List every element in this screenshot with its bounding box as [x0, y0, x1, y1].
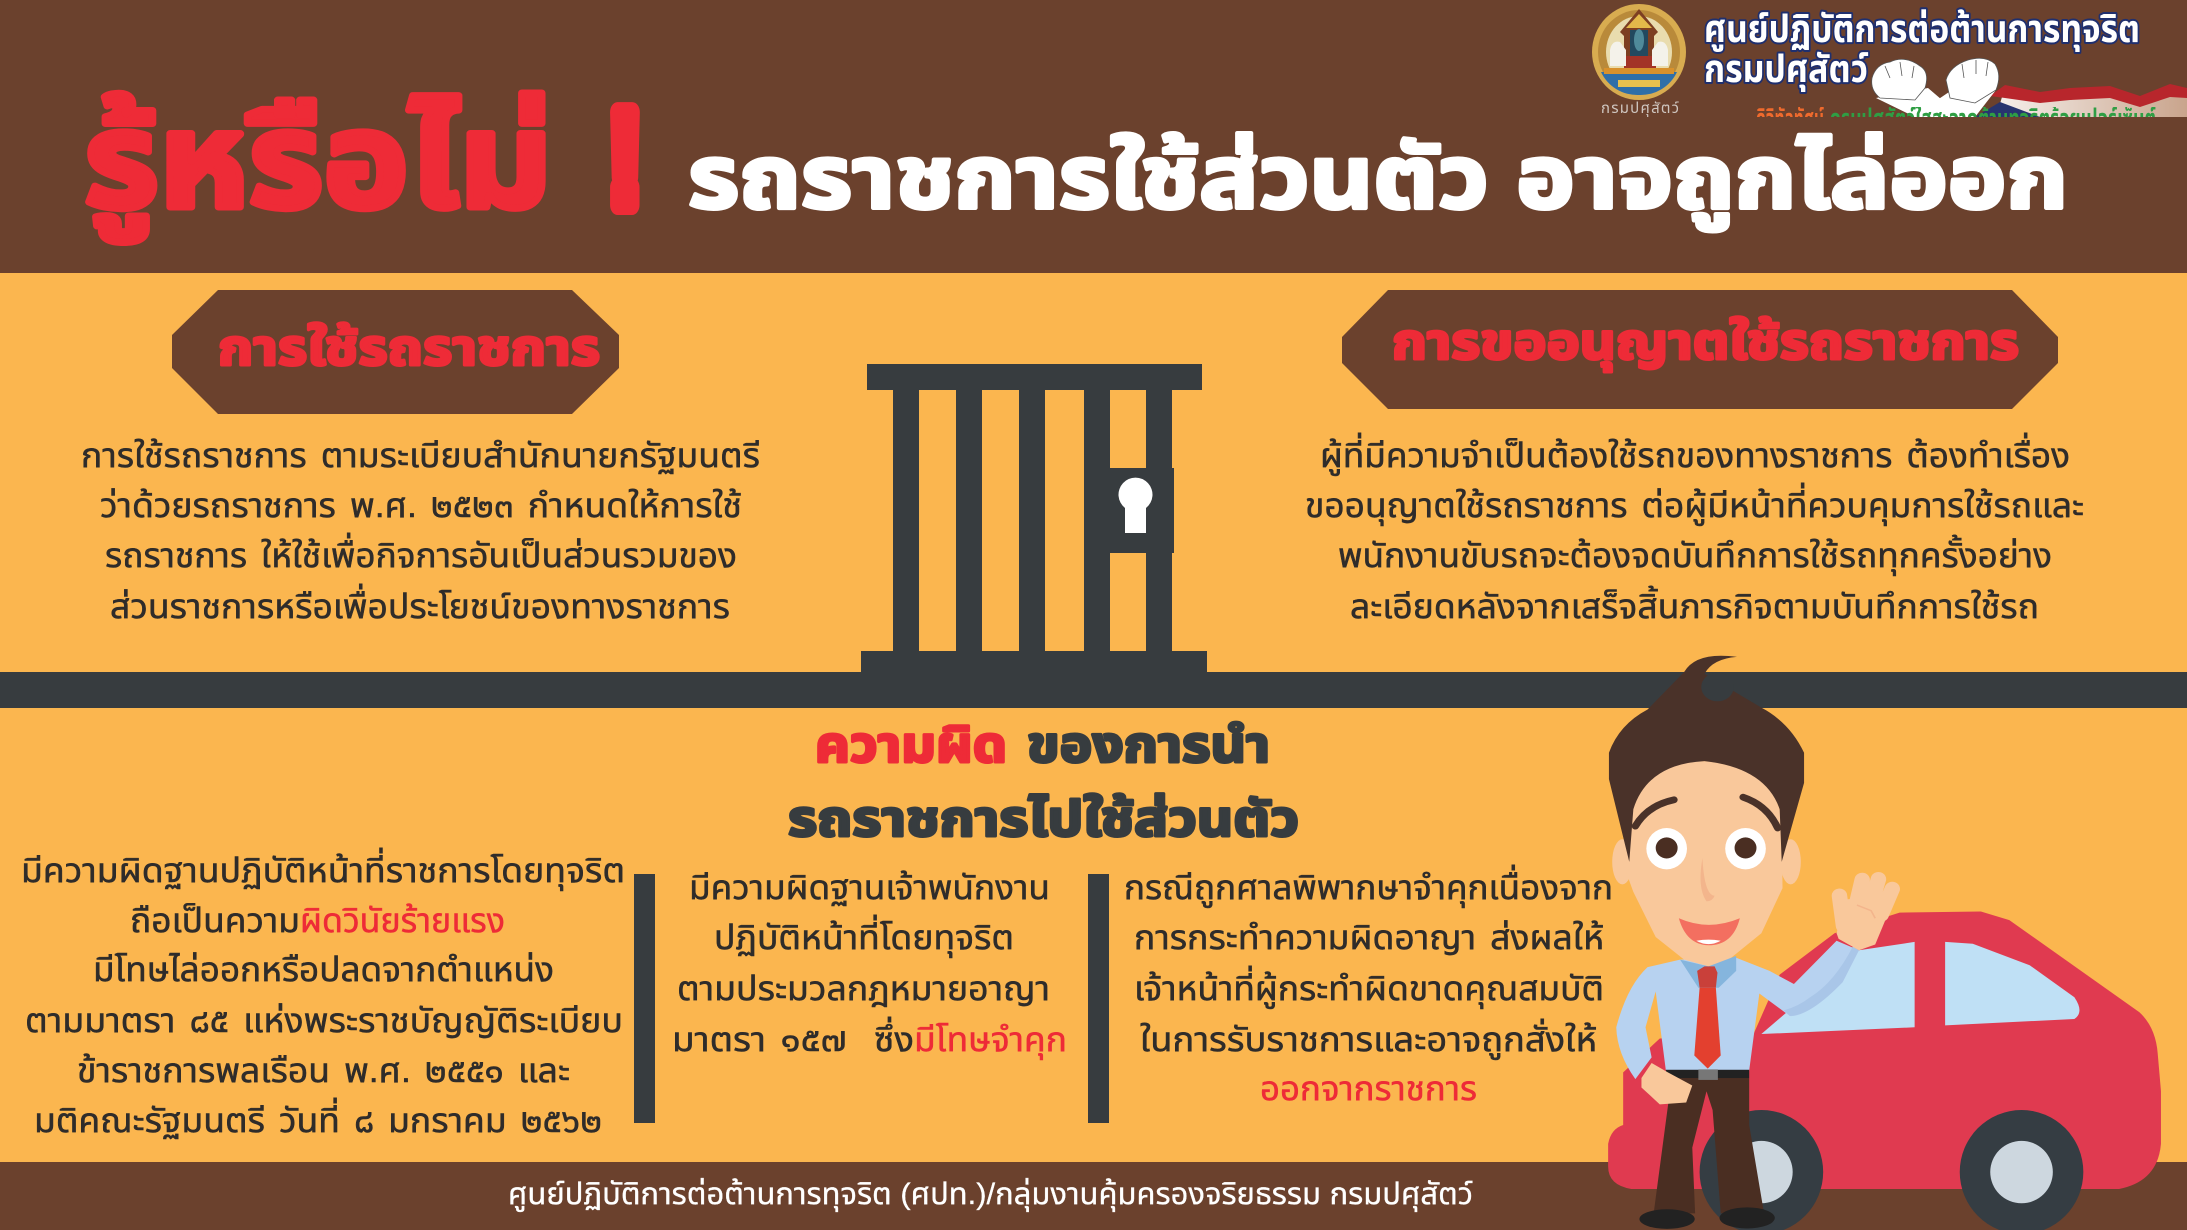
title: did you know: ! [608, 83, 642, 234]
agency name: ศูนย์ปฏิบัติการต่อต้านการทุจริต [1704, 9, 2140, 52]
eyes [1646, 828, 1687, 869]
text: use of official cars: การใช้รถราชการ ตามระเบียบสำนักนายกรัฐมนตรี [81, 437, 760, 475]
text: criminal offence: มีโทษจำคุก [914, 1021, 1067, 1060]
text: disciplinary offence: ตามมาตรา ๘๕ แห่งพระราชบัญญัติระเบียบ [25, 1002, 623, 1040]
illustration: man and car [1608, 656, 2161, 1230]
text: disciplinary offence: ข้าราชการพลเรือน พ.ศ. ๒๕๕๑ และ [77, 1052, 570, 1090]
text: criminal offence: มีความผิดฐานเจ้าพนักงาน [689, 869, 1050, 907]
badge: use of official cars: การใช้รถราชการ [218, 320, 600, 376]
icon: red car [1608, 911, 2161, 1230]
footer band [0, 1162, 2187, 1230]
necktie [1697, 966, 1717, 988]
heading: offences: ของการนำ [1027, 717, 1270, 773]
text: requesting permission: ขออนุญาตใช้รถราชการ ต่อผู้มีหน้าที่ควบคุมการใช้รถและ [1305, 482, 2084, 526]
text: requesting permission: พนักงานขับรถจะต้องจดบันทึกการใช้รถทุกครั้งอย่าง [1338, 534, 2052, 576]
mouth [1679, 918, 1740, 945]
slogan (clipped) [1757, 107, 2156, 117]
hair [1609, 656, 1804, 862]
text: use of official cars: ว่าด้วยรถราชการ พ.ศ. ๒๕๒๓ กำหนดให้การใช้ [100, 487, 742, 525]
text: use of official cars [81, 437, 760, 626]
text: loss of qualification: กรณีถูกศาลพิพากษาจำคุกเนื่องจาก [1124, 864, 1613, 908]
footer credit: ศูนย์ปฏิบัติการต่อต้านการทุจริต (ศปท.)/กลุ่มงานคุ้มครองจริยธรรม กรมปศุสัตว์ [508, 1178, 1473, 1212]
text: requesting permission [1305, 432, 2084, 626]
logo block [1592, 4, 2187, 117]
clasped fists [1872, 58, 1999, 117]
icon: keyhole [1118, 478, 1152, 533]
shirt [1616, 941, 1859, 1079]
belt [1666, 1070, 1749, 1078]
text: disciplinary offence: มีโทษไล่ออกหรือปลดจากตำแหน่ง [93, 951, 554, 989]
text: use of official cars: รถราชการ ให้ใช้เพื่อกิจการอันเป็นส่วนรวมของ [105, 532, 737, 575]
icon: jail cell [861, 364, 1207, 672]
text: disciplinary offence: ผิดวินัยร้ายแรง [300, 902, 505, 940]
divider [634, 874, 655, 1123]
panel: requesting permission [1305, 290, 2084, 626]
text: requesting permission: ละเอียดหลังจากเสร็จสิ้นภารกิจตามบันทึกการใช้รถ [1350, 585, 2039, 626]
heading: offences: รถราชการไปใช้ส่วนตัว [788, 791, 1299, 847]
panel: use of official cars [81, 290, 760, 626]
text: disciplinary offence: มีความผิดฐานปฏิบัติหน้าที่ราชการโดยทุจริต [21, 847, 625, 891]
slogan (clipped): ดิจิทัลทัศน์ [1756, 103, 1824, 133]
text: loss of qualification: เจ้าหน้าที่ผู้กระทำผิดขาดคุณสมบัติ [1134, 965, 1604, 1009]
text: use of official cars: ส่วนราชการหรือเพื่อประโยชน์ของทางราชการ [110, 583, 730, 626]
nose [1701, 858, 1715, 901]
badge: requesting permission [1342, 290, 2058, 409]
text: criminal offence: ตามประมวลกฎหมายอาญา [677, 970, 1050, 1008]
text: requesting permission: ผู้ที่มีความจำเป็นต้องใช้รถของทางราชการ ต้องทำเรื่อง [1320, 432, 2070, 476]
text: loss of qualification: การกระทำความผิดอาญา ส่งผลให้ [1134, 919, 1604, 957]
flag strip [1975, 84, 2187, 117]
text: loss of qualification: ในการรับราชการและอาจถูกสั่งให้ [1140, 1018, 1597, 1060]
trousers [1654, 1078, 1763, 1213]
text: criminal offence [672, 869, 1067, 1060]
emblem caption: กรมปศุสัตว์ [1601, 100, 1679, 117]
eyebrows [1635, 797, 1778, 828]
text: criminal offence: ปฏิบัติหน้าที่โดยทุจริต [714, 914, 1014, 958]
hands [1641, 1063, 1692, 1104]
emblem [1592, 4, 1686, 100]
text: loss of qualification: ออกจากราชการ [1260, 1070, 1477, 1108]
agency name: กรมปศุสัตว์ [1704, 49, 1869, 92]
badge: use of official cars [172, 290, 619, 414]
collar [1680, 956, 1736, 988]
text: disciplinary offence: ถือเป็นความ [130, 902, 300, 940]
ground bar [0, 672, 2187, 708]
title: official car for personal use: รถราชการใช้ส่วนตัว อาจถูกไล่ออก [688, 128, 2068, 232]
icon: man [1609, 656, 1896, 1229]
neck and face [1612, 839, 1633, 884]
text: criminal offence: มาตรา ๑๕๗ [672, 1021, 847, 1059]
badge: requesting permission: การขออนุญาตใช้รถราชการ [1392, 314, 2019, 372]
heading: offences [788, 717, 1299, 847]
text: disciplinary offence: มติคณะรัฐมนตรี วันที่ ๘ มกราคม ๒๕๖๒ [34, 1097, 602, 1140]
text: criminal offence: ซึ่ง [874, 1016, 914, 1059]
title: did you know: รู้หรือไม่ [84, 87, 552, 242]
text: loss of qualification [1124, 864, 1613, 1108]
divider [1088, 874, 1109, 1123]
heading: offences: ความผิด [815, 717, 1007, 773]
agency name [1704, 9, 2140, 92]
header band [0, 0, 2187, 273]
text: disciplinary offence [21, 847, 625, 1140]
